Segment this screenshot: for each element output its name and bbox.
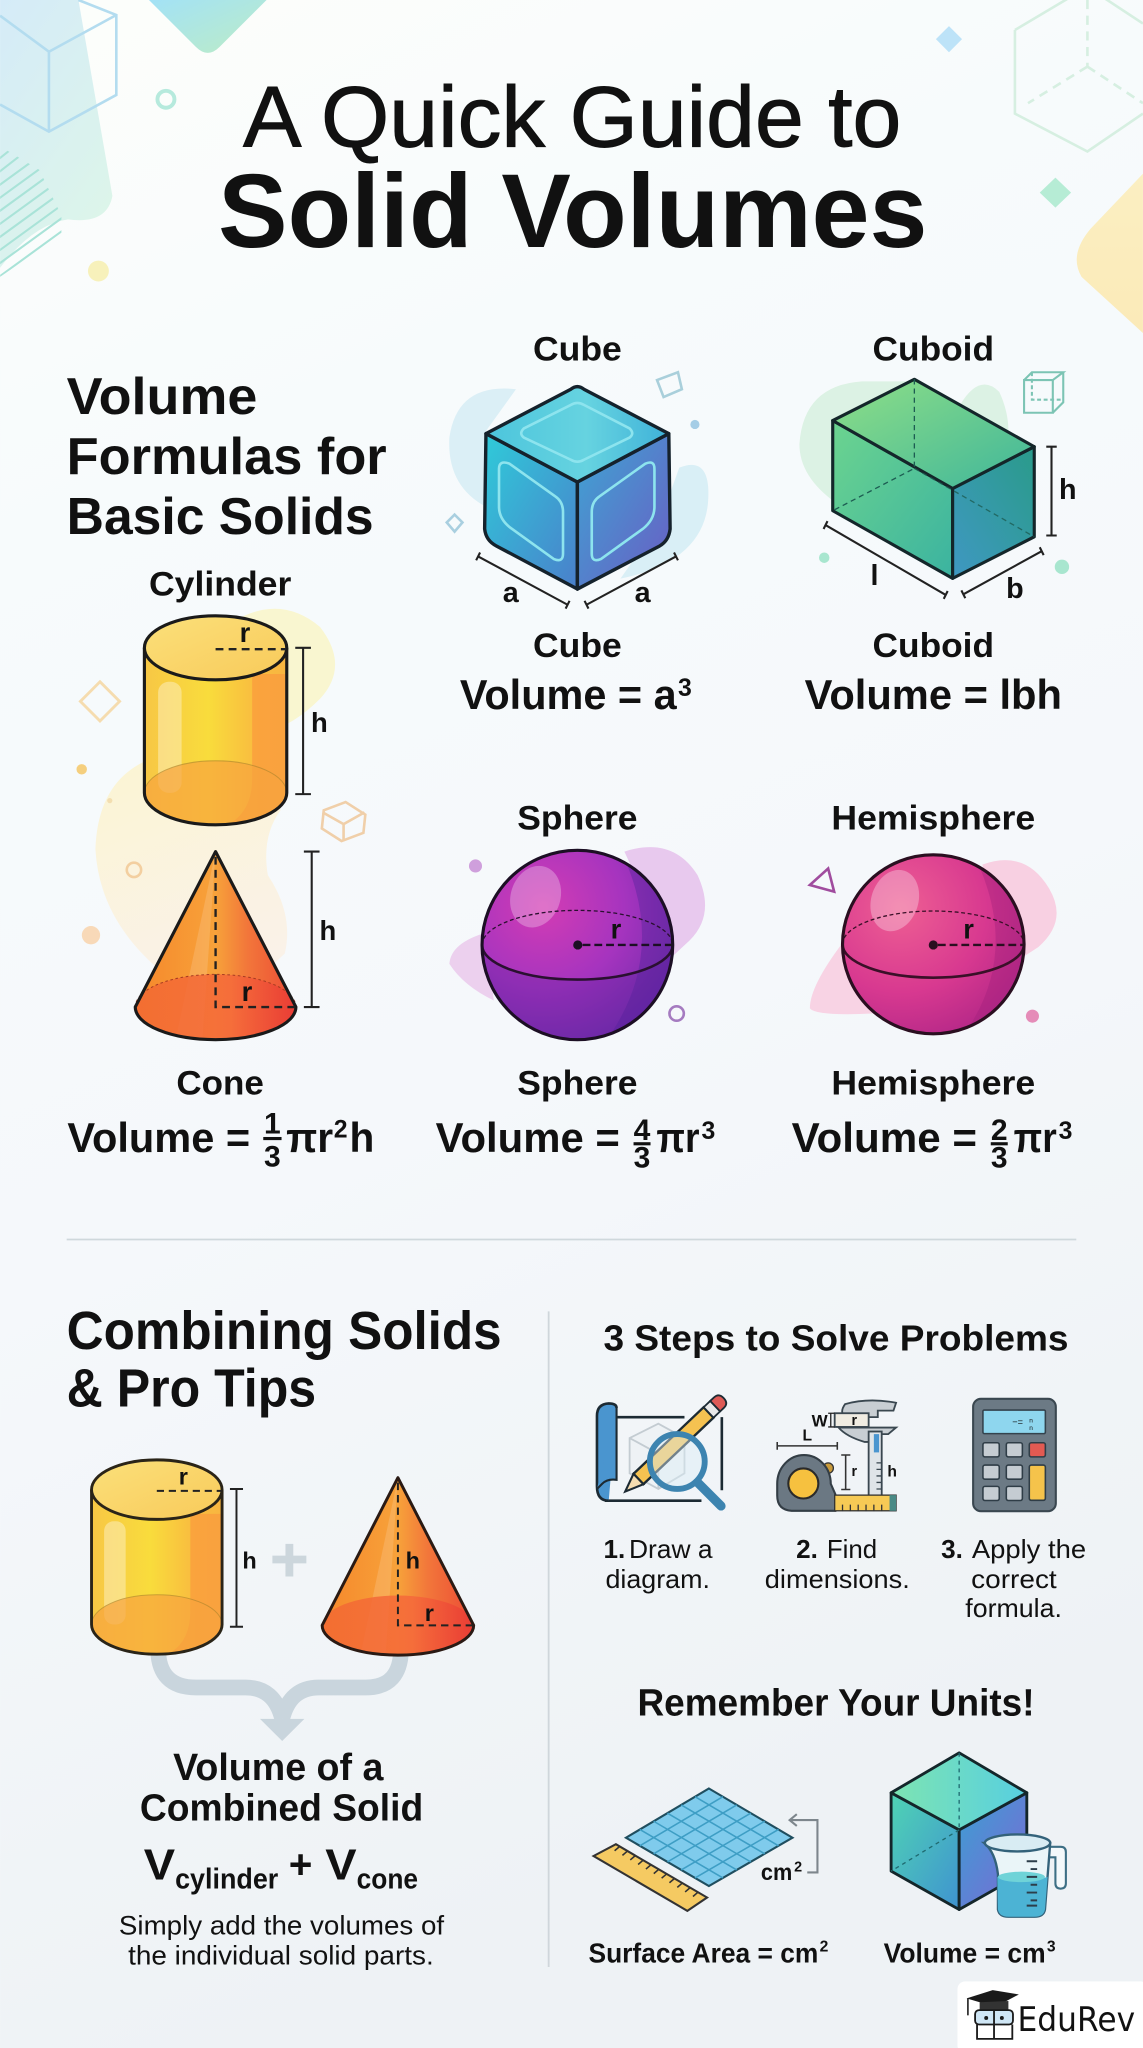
icon: calculator: n: [1029, 1417, 1033, 1424]
panel: hemisphere: [810, 799, 1057, 1103]
icon: calculator: n: [1029, 1425, 1033, 1432]
text: step 2: dimensions.: [765, 1564, 910, 1594]
combined solid diagram: cone: r: [425, 1600, 434, 1626]
panel: cuboid: Cuboid: [873, 330, 994, 368]
text: add the volumes note: Simply add the volumes of: [119, 1910, 445, 1940]
decorative corner shapes: top right: [936, 0, 1143, 333]
panel: cylinder: h: [311, 707, 328, 738]
formula: cone volume: [67, 1108, 374, 1173]
combined solid diagram: cylinder: h: [242, 1548, 257, 1574]
icon: draw a diagram: [597, 1393, 729, 1506]
icon: find dimensions: W: [812, 1411, 828, 1430]
heading: combining solids and pro tips: & Pro Tips: [67, 1360, 316, 1419]
formula: combined volume: V: [325, 1842, 357, 1890]
formula: sphere volume: πr: [656, 1114, 700, 1161]
text: add the volumes note: [119, 1910, 445, 1970]
panel: cube: a: [635, 577, 652, 609]
text: step 2: Find: [827, 1534, 877, 1564]
formula: sphere volume: Volume =: [436, 1114, 620, 1161]
panel: cone: [135, 852, 336, 1103]
cone body: [135, 852, 296, 1040]
logo: EduRev: EduRev: [1018, 2000, 1135, 2040]
plus sign: [272, 1544, 306, 1576]
heading: combining solids and pro tips: [67, 1302, 502, 1419]
icon: find dimensions: L: [802, 1428, 812, 1445]
decorative corner shapes: top left: [0, 0, 267, 281]
formula: cube volume: Volume = a: [460, 671, 677, 718]
formula: cone volume: 1: [264, 1108, 281, 1141]
panel: cylinder: Cylinder: [149, 566, 291, 604]
text: step 3: correct: [971, 1564, 1058, 1594]
formula: hemisphere volume: πr: [1014, 1114, 1057, 1161]
cuboid body: [833, 379, 1034, 578]
arrow: combining into one: [158, 1648, 401, 1741]
heading: combining solids and pro tips: Combining Solids: [67, 1302, 502, 1361]
panel: cylinder: r: [240, 617, 251, 648]
panel: cylinder: [76, 566, 366, 1006]
panel: cuboid: l: [871, 560, 879, 592]
icon: surface area grid and ruler: [594, 1788, 817, 1911]
text: surface area unit: Surface Area = cm: [588, 1937, 818, 1968]
combined solid diagram: cylinder: [92, 1460, 257, 1654]
icon: surface area grid and ruler: 2: [794, 1860, 802, 1876]
panel: cone: Cone: [176, 1065, 264, 1103]
text: step 3: [941, 1534, 1086, 1623]
formula: cone volume: Volume =: [67, 1114, 250, 1161]
panel: cube: [447, 330, 708, 665]
heading: remember your units: Remember Your Units!: [637, 1683, 1035, 1725]
panel: cube: a: [503, 577, 520, 609]
heading: volume formulas for basic solids: [67, 368, 387, 546]
panel: cube: Cube: [533, 627, 622, 665]
icon: find dimensions: r: [851, 1413, 857, 1429]
formula: hemisphere volume: 3: [1059, 1118, 1072, 1145]
hemisphere body: [843, 855, 1024, 1034]
panel: cuboid: [799, 330, 1077, 665]
text: step 2: 2.: [796, 1534, 818, 1564]
formula: cone volume: 3: [264, 1140, 281, 1173]
formula: cone volume: h: [349, 1114, 374, 1161]
text: step 3: Apply the: [972, 1534, 1086, 1564]
formula: sphere volume: 3: [634, 1142, 650, 1175]
heading: volume formulas for basic solids: Basic Solids: [67, 488, 374, 546]
cube body: [485, 387, 670, 589]
icon: surface area grid and ruler: cm: [761, 1859, 792, 1885]
icon: find dimensions: r: [851, 1464, 857, 1480]
formula: hemisphere volume: Volume =: [792, 1114, 977, 1161]
text: volume unit: 3: [1047, 1938, 1056, 1955]
heading: volume formulas for basic solids: Formulas for: [67, 428, 387, 486]
heading: 3 steps: 3 Steps to Solve Problems: [603, 1318, 1068, 1359]
text: step 1: diagram.: [605, 1564, 710, 1594]
title: Solid Volumes: [218, 153, 927, 270]
panel: hemisphere: Hemisphere: [831, 799, 1035, 837]
icon: calculator: −=: [1012, 1417, 1023, 1427]
text: surface area unit: 2: [820, 1938, 829, 1955]
formula: sphere volume: 3: [701, 1118, 715, 1145]
icon: find dimensions: h: [887, 1464, 897, 1481]
formula: sphere volume: 4: [634, 1114, 651, 1147]
panel: cone: r: [242, 976, 253, 1007]
panel: cuboid: Cuboid: [873, 627, 994, 665]
formula: hemisphere volume: 2: [991, 1114, 1008, 1147]
formula: cone volume: 2: [334, 1117, 348, 1144]
panel: cuboid: b: [1006, 573, 1024, 605]
formula: combined volume: +: [289, 1841, 312, 1887]
title: [218, 69, 927, 270]
formula: sphere volume: [436, 1114, 715, 1175]
panel: cube: Cube: [533, 330, 622, 368]
text: volume unit: Volume = cm: [884, 1937, 1046, 1968]
panel: hemisphere: r: [963, 913, 974, 944]
panel: hemisphere: Hemisphere: [831, 1065, 1035, 1103]
logo: EduRev: [957, 1981, 1143, 2048]
icon: volume cube and measuring jug: [891, 1753, 1066, 1917]
panel: sphere: Sphere: [517, 1065, 637, 1103]
formula: hemisphere volume: [792, 1114, 1072, 1175]
panel: sphere: Sphere: [517, 799, 637, 837]
formula: cone volume: πr: [286, 1114, 333, 1161]
text: step 3: 3.: [941, 1534, 963, 1564]
heading: volume formulas for basic solids: Volume: [67, 368, 257, 426]
panel: cuboid: h: [1059, 474, 1077, 506]
text: step 2: [765, 1534, 910, 1594]
text: step 1: [604, 1534, 713, 1594]
combined solid diagram: cone: h: [406, 1548, 420, 1574]
panel: sphere: r: [611, 913, 622, 944]
panel: sphere: [449, 799, 705, 1103]
formula: combined volume: cone: [357, 1864, 418, 1896]
panel: cone: h: [320, 915, 336, 946]
text: step 3: formula.: [965, 1593, 1062, 1623]
cylinder body: [144, 616, 287, 825]
text: volume of a combined solid: Combined Solid: [140, 1788, 423, 1830]
text: add the volumes note: the individual solid parts.: [128, 1940, 434, 1970]
text: step 1: Draw a: [629, 1534, 713, 1564]
icon: calculator: [973, 1399, 1056, 1511]
formula: combined volume: cylinder: [175, 1864, 278, 1896]
formula: cuboid volume: Volume = lbh: [805, 671, 1062, 718]
formula: combined volume: V: [144, 1842, 175, 1890]
sphere body: [482, 850, 673, 1040]
formula: combined volume: [144, 1841, 418, 1896]
icon: find dimensions: [777, 1400, 897, 1511]
text: step 1: 1.: [603, 1534, 625, 1564]
formula: cube volume: 3: [678, 675, 692, 702]
text: volume of a combined solid: Volume of a: [173, 1747, 384, 1789]
combined solid diagram: cylinder: r: [179, 1463, 188, 1489]
title: A Quick Guide to: [243, 69, 901, 165]
formula: hemisphere volume: 3: [991, 1142, 1008, 1175]
text: volume of a combined solid: [140, 1747, 423, 1830]
combined solid diagram: cone: [322, 1478, 474, 1655]
